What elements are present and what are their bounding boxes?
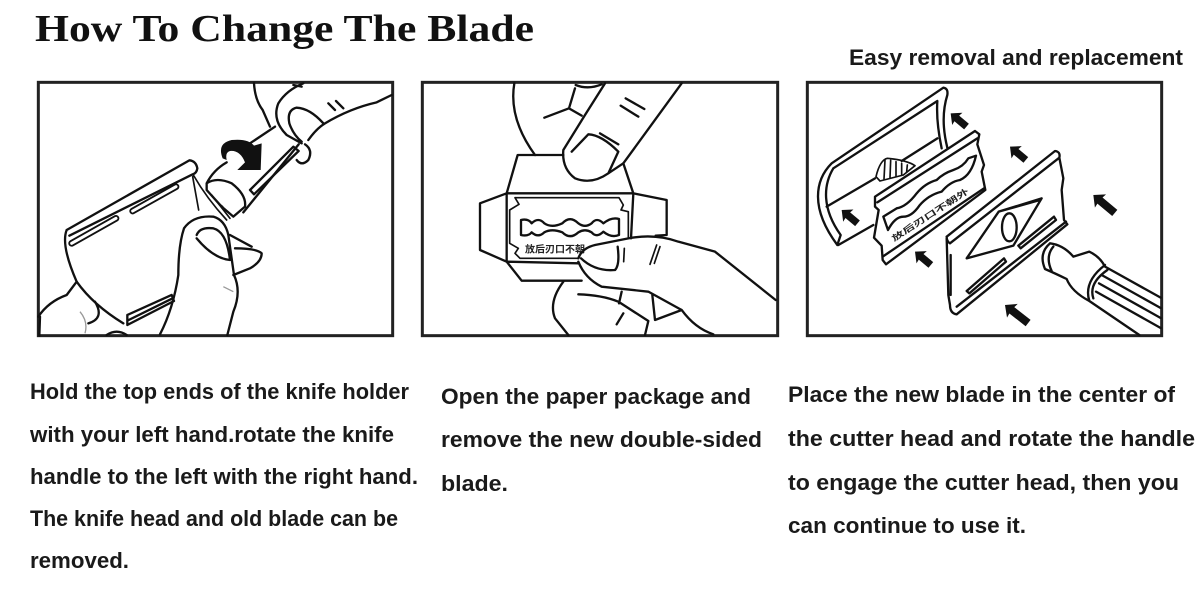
cap screw [876, 158, 915, 181]
razor head [65, 160, 227, 325]
text block: step 3 instructions: can continue to use it. [788, 513, 1026, 538]
panel: step 1 illustration [38, 82, 393, 336]
hand at top right [254, 83, 392, 143]
icons: direction arrows [837, 107, 1120, 330]
hand at bottom [38, 216, 262, 336]
new blade [874, 131, 985, 264]
panel: step 2 illustration [422, 82, 778, 336]
blade text: 放后刃口不朝外 [890, 186, 971, 243]
text block: step 3 instructions: to engage the cutter head, then you [788, 470, 1179, 495]
text block: step 3 instructions: Place the new blade in the center of [788, 382, 1176, 407]
text block: step 1 instructions: handle to the left with the right hand. [30, 464, 418, 489]
text block: step 1 instructions: removed. [30, 548, 129, 573]
text block: step 3 instructions: the cutter head and rotate the handle [788, 426, 1195, 451]
razor handle [207, 127, 310, 218]
icon: rotate arrow [221, 140, 262, 170]
lower hand and finger [553, 236, 776, 335]
panel: step 3 illustration [807, 82, 1162, 336]
caption: easy removal: Easy removal and replacement [849, 45, 1184, 70]
skin creases [80, 287, 233, 333]
text block: step 1 instructions: with your left hand.rotate the knife [29, 422, 394, 447]
text block: step 1 instructions [29, 379, 418, 573]
text block: step 2 instructions: remove the new double-sided [441, 427, 762, 452]
razor cap [818, 88, 947, 245]
text block: step 2 instructions [441, 384, 762, 496]
base plate [947, 151, 1067, 314]
blade text: 放后刃口不朝 [525, 243, 585, 255]
text block: step 1 instructions: Hold the top ends of the knife holder [30, 379, 409, 404]
text block: step 2 instructions: Open the paper package and [441, 384, 751, 409]
text block: step 2 instructions: blade. [441, 471, 508, 496]
handle [1043, 243, 1161, 335]
text block: step 1 instructions: The knife head and old blade can be [30, 506, 398, 531]
title: How To Change The Blade [35, 8, 534, 50]
text block: step 3 instructions [788, 382, 1195, 538]
paper package [480, 155, 667, 281]
upper hand and thumb [513, 83, 682, 181]
double-sided blade [510, 198, 628, 258]
